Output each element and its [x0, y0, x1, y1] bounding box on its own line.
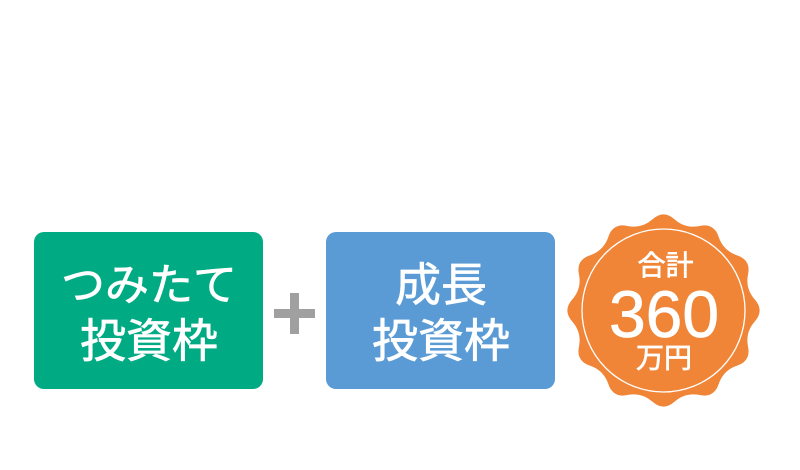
heading: 投資枠 (つみたて): 投資枠 [80, 315, 218, 367]
badge: 合計360万円 [567, 214, 760, 407]
heading: 投資枠 (成長): 投資枠 [372, 315, 510, 367]
label: 万円: 万円 [636, 342, 692, 374]
icon: plus sign [274, 293, 315, 334]
panel: つみたて投資枠 [34, 232, 263, 389]
value: 360: 360 [609, 277, 719, 351]
heading: つみたて: つみたて [61, 261, 237, 310]
label: 合計: 合計 [637, 250, 694, 281]
heading: 成長: 成長 [395, 259, 487, 311]
panel: 成長投資枠 [326, 232, 555, 389]
